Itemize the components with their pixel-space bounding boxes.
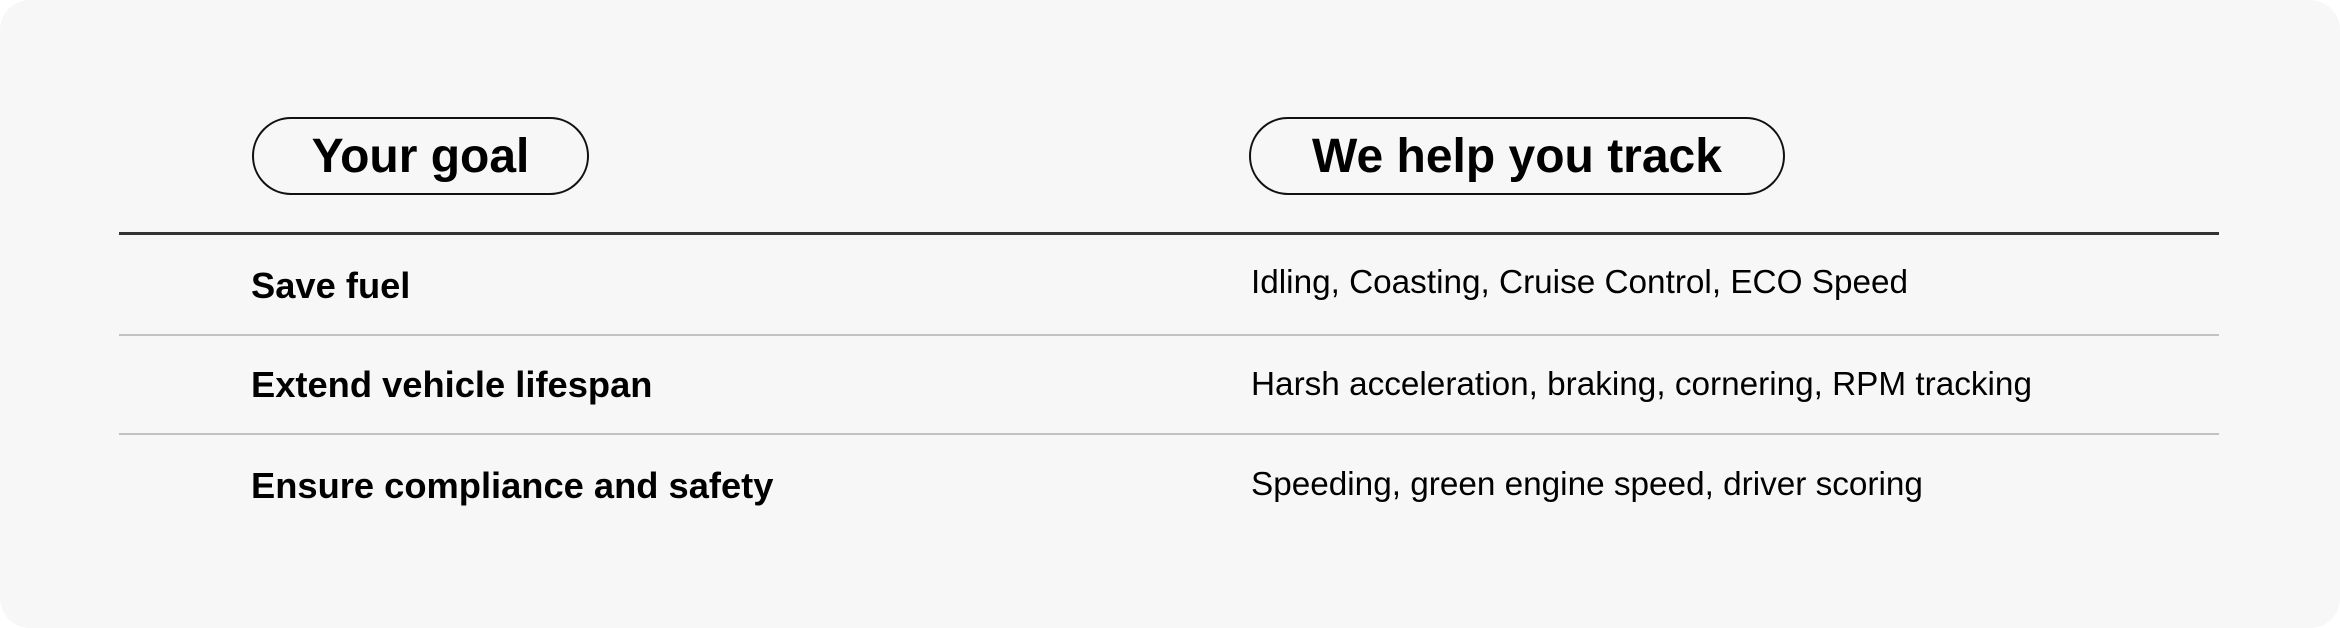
row 2 tracking: Harsh acceleration, braking, cornering, RPM tracking xyxy=(1251,366,2032,403)
row 3 tracking: Speeding, green engine speed, driver scoring xyxy=(1251,466,1923,503)
pill: We help you track xyxy=(1249,117,1785,195)
row 1 goal: Save fuel xyxy=(251,265,410,306)
row 3 goal: Ensure compliance and safety xyxy=(251,465,773,506)
pill: Your goal xyxy=(252,117,589,195)
row 2 goal: Extend vehicle lifespan xyxy=(251,364,652,405)
row 1 tracking: Idling, Coasting, Cruise Control, ECO Speed xyxy=(1251,264,1908,301)
pill: Your goal: Your goal xyxy=(312,130,529,182)
pill: We help you track: We help you track xyxy=(1312,130,1722,182)
